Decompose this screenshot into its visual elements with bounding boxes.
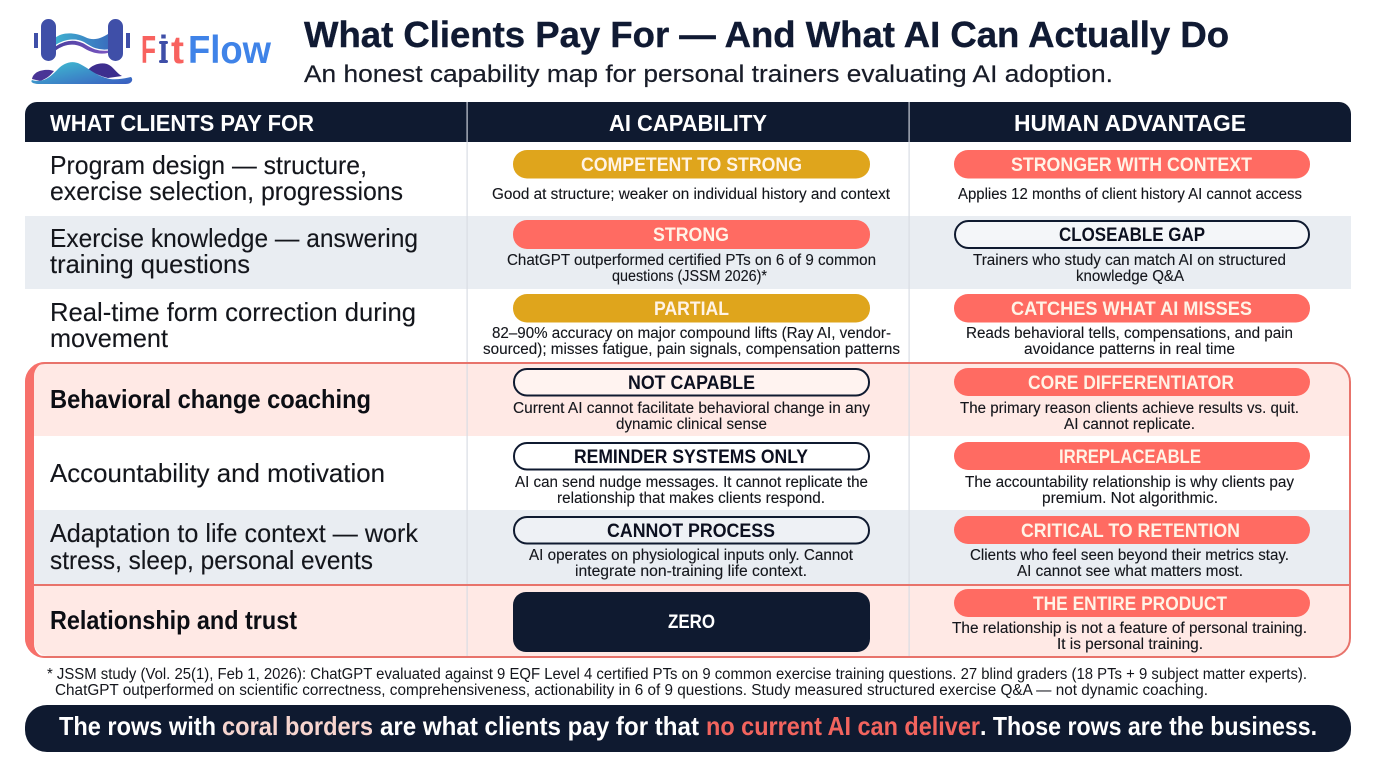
pill: reminder systems only: [514, 443, 869, 470]
row: exercise knowledge: [50, 220, 1309, 285]
pill: the entire product: [954, 589, 1310, 617]
pill: reminder systems only: REMINDER SYSTEMS ONLY: [574, 447, 808, 468]
human description: [952, 620, 1307, 653]
pill: critical to retention: CRITICAL TO RETENTION: [1021, 521, 1240, 542]
pill: strong: [513, 220, 870, 249]
pill: core differentiator: CORE DIFFERENTIATOR: [1028, 373, 1234, 394]
pill: stronger with context: [954, 150, 1310, 178]
row backgrounds: [25, 142, 1351, 657]
pill: stronger with context: STRONGER WITH CONTEXT: [1011, 155, 1252, 176]
human description: AI cannot replicate.: [1064, 416, 1195, 433]
pill: core differentiator: [954, 368, 1310, 396]
human description: The accountability relationship is why clients pay: [965, 474, 1294, 491]
footnote: [47, 666, 1307, 699]
label: program design: exercise selection, progressions: [50, 176, 403, 206]
label: program design: [50, 150, 403, 206]
pill: cannot process: CANNOT PROCESS: [607, 521, 775, 542]
label: form correction: Real-time form correction during: [50, 297, 416, 327]
pill: partial: [513, 294, 870, 322]
bottom banner: . Those rows are the business.: [980, 711, 1317, 741]
icon: dumbbell and wave: [31, 19, 132, 84]
wordmark: t: [171, 29, 184, 72]
AI description: questions (JSSM 2026)*: [612, 268, 767, 285]
coral border frame: [25, 362, 1350, 658]
header: AI capability: AI CAPABILITY: [609, 110, 767, 136]
header: what clients pay for: WHAT CLIENTS PAY FOR: [50, 110, 314, 136]
human description: [965, 474, 1294, 507]
human description: [970, 547, 1289, 580]
block: zero: [513, 592, 870, 652]
subtitle: An honest capability map for personal trainers evaluating AI adoption.: [304, 61, 1113, 88]
label: behavioral change coaching: Behavioral change coaching: [50, 384, 371, 414]
human description: Applies 12 months of client history AI cannot access: [958, 186, 1302, 203]
footnote: * JSSM study (Vol. 25(1), Feb 1, 2026): ChatGPT evaluated against 9 EQF Level 4 certified PTs on 9 common exercise training questions. 27 blind graders (18 PTs + 9 subject matter experts).: [47, 666, 1307, 683]
AI description: Current AI cannot facilitate behavioral change in any: [513, 400, 870, 417]
pill: irreplaceable: [954, 442, 1310, 470]
pill: strong: STRONG: [653, 225, 729, 246]
AI description: relationship that makes clients respond.: [557, 490, 825, 507]
wordmark: i: [159, 29, 168, 72]
table header: [25, 102, 1351, 142]
label: relationship: Relationship and trust: [50, 605, 297, 635]
bottom banner: coral borders: [222, 711, 373, 741]
AI description: [483, 325, 900, 358]
header: human advantage: HUMAN ADVANTAGE: [1014, 110, 1246, 136]
wordmark: F: [141, 29, 156, 72]
human description: Clients who feel seen beyond their metrics stay.: [970, 547, 1289, 564]
title: What Clients Pay For — And What AI Can Actually Do: [304, 14, 1229, 55]
label: adaptation: Adaptation to life context — work: [50, 518, 419, 548]
wordmark: Flow: [188, 29, 272, 72]
human description: [973, 252, 1286, 285]
label: accountability: Accountability and motivation: [50, 458, 385, 488]
row: relationship and trust: [50, 589, 1310, 653]
label: form correction: movement: [50, 323, 169, 353]
bottom banner: are what clients pay for that: [380, 711, 699, 741]
label: exercise knowledge: training questions: [50, 249, 250, 279]
AI description: [507, 252, 876, 285]
pill: not capable: [514, 369, 869, 396]
human description: [960, 400, 1299, 433]
pill: not capable: NOT CAPABLE: [628, 373, 755, 394]
bottom banner: no current AI can deliver: [706, 711, 980, 741]
AI description: Good at structure; weaker on individual history and context: [492, 186, 891, 203]
human description: It is personal training.: [1057, 636, 1203, 653]
wordmark: [141, 29, 272, 72]
label: adaptation: stress, sleep, personal events: [50, 545, 373, 575]
row: real-time form correction: [50, 294, 1310, 358]
AI description: ChatGPT outperformed certified PTs on 6 of 9 common: [507, 252, 876, 269]
row: program design: [50, 150, 1310, 206]
AI description: AI operates on physiological inputs only. Cannot: [529, 547, 854, 564]
pill: critical to retention: [954, 516, 1310, 544]
row: behavioral change coaching: [50, 368, 1310, 433]
pill: competent to strong: [513, 150, 870, 178]
AI description: [529, 547, 854, 580]
pill: irreplaceable: IRREPLACEABLE: [1059, 447, 1201, 468]
human description: [966, 325, 1293, 358]
bottom banner: The rows with: [59, 711, 216, 741]
human description: knowledge Q&A: [1076, 268, 1185, 285]
pill: partial: PARTIAL: [654, 299, 729, 320]
row: accountability and motivation: [50, 442, 1310, 507]
AI description: sourced); misses fatigue, pain signals, compensation patterns: [483, 341, 900, 358]
label: exercise knowledge: Exercise knowledge — answering: [50, 223, 418, 253]
human description: AI cannot see what matters most.: [1017, 563, 1243, 580]
human description: premium. Not algorithmic.: [1042, 490, 1218, 507]
AI description: 82–90% accuracy on major compound lifts (Ray AI, vendor-: [492, 325, 891, 342]
pill: catches what AI misses: [954, 294, 1310, 322]
label: adaptation: [50, 518, 419, 575]
human description: avoidance patterns in real time: [1024, 341, 1235, 358]
AI description: [513, 400, 870, 433]
label: program design: Program design — structure,: [50, 150, 367, 180]
AI description: AI can send nudge messages. It cannot replicate the: [515, 474, 868, 491]
human description: Trainers who study can match AI on structured: [973, 252, 1286, 269]
block: zero: ZERO: [668, 612, 715, 633]
label: exercise knowledge: [50, 223, 418, 279]
human description: The primary reason clients achieve results vs. quit.: [960, 400, 1299, 417]
AI description: [515, 474, 868, 507]
AI description: integrate non-training life context.: [575, 563, 807, 580]
human description: Reads behavioral tells, compensations, and pain: [966, 325, 1293, 342]
row: adaptation to life context: [50, 516, 1310, 580]
pill: competent to strong: COMPETENT TO STRONG: [581, 155, 802, 176]
human description: The relationship is not a feature of personal training.: [952, 620, 1307, 637]
pill: cannot process: [514, 517, 869, 544]
label: form correction: [50, 297, 416, 353]
bottom banner: [25, 705, 1351, 752]
footnote: ChatGPT outperformed on scientific correctness, comprehensiveness, actionability in 6 of 9 questions. Study measured structured exercise Q&A — not dynamic coaching.: [55, 682, 1208, 699]
pill: the entire product: THE ENTIRE PRODUCT: [1033, 594, 1227, 615]
pill: closeable gap: CLOSEABLE GAP: [1059, 225, 1205, 246]
pill: closeable gap: [955, 221, 1309, 248]
AI description: dynamic clinical sense: [616, 416, 767, 433]
pill: catches what AI misses: CATCHES WHAT AI MISSES: [1011, 299, 1252, 320]
logo: FitFlow: [31, 19, 272, 84]
